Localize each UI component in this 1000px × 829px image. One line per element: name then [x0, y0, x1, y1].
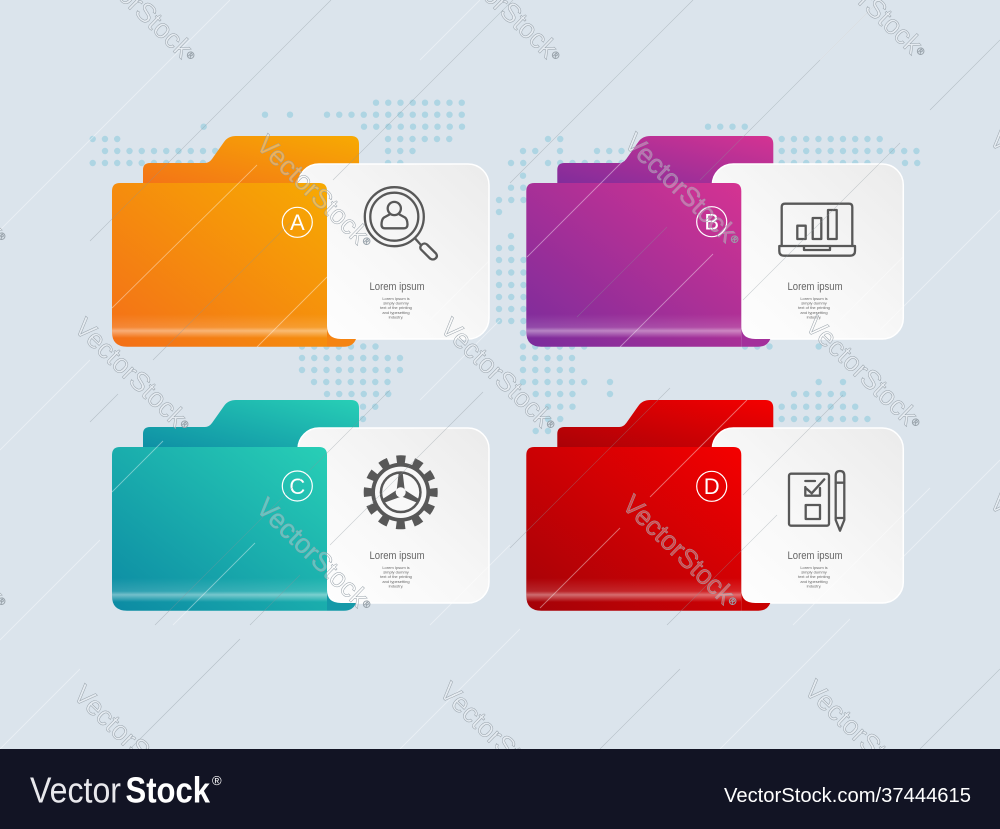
folder A highlight: [112, 314, 327, 338]
folder D back: [557, 400, 773, 456]
card B text: industry.: [807, 314, 821, 319]
watermarks: VectorStock®: [800, 310, 929, 436]
watermarks: VectorStock®: [617, 489, 746, 615]
card A text: Lorem Ipsum is: [382, 296, 410, 301]
watermarks: VectorStock®: [69, 312, 198, 438]
folder A back: [143, 136, 359, 192]
folder D: [526, 400, 903, 611]
card C text: Lorem Ipsum is: [382, 565, 410, 570]
badge A: A: [290, 210, 305, 235]
footer image id: VectorStock.com/37444615: [724, 784, 971, 807]
icon: laptop chart: [779, 204, 855, 256]
icon: checklist and pen: [789, 471, 844, 531]
card A: [298, 164, 489, 339]
card C text: industry.: [389, 583, 403, 588]
folder D lip: [741, 590, 770, 611]
card A text: and typesetting: [382, 310, 410, 315]
dotted world map: [93, 103, 918, 431]
card D text: and typesetting: [800, 579, 828, 584]
card A text: Lorem ipsum: [370, 281, 424, 293]
footer logo: Vector: [30, 770, 121, 810]
watermarks: VectorStock®: [799, 674, 928, 800]
card D text: [788, 550, 842, 588]
badge D: [697, 471, 727, 501]
folder B highlight: [526, 314, 741, 338]
badge B: B: [704, 210, 719, 234]
card B text: text of the printing: [798, 305, 830, 310]
card D text: simply dummy: [801, 570, 827, 575]
footer logo: Stock: [126, 770, 211, 810]
folder C lip: [327, 590, 356, 611]
card B text: simply dummy: [801, 301, 827, 306]
folder C: [112, 400, 489, 611]
card B text: and typesetting: [800, 310, 828, 315]
badge D: D: [704, 474, 720, 499]
card A text: industry.: [389, 314, 403, 319]
watermarks: VectorStock®: [68, 679, 197, 805]
folder B lip: [741, 326, 770, 347]
watermarks: VectorStock®: [434, 676, 563, 802]
badge B: [697, 207, 727, 237]
card D text: Lorem ipsum: [788, 550, 842, 562]
card B: [712, 164, 903, 339]
folder D highlight: [526, 578, 741, 602]
watermarks: VectorStock®: [251, 129, 380, 255]
badge C: [282, 471, 312, 501]
folder B front: [526, 183, 741, 347]
card C text: and typesetting: [382, 579, 410, 584]
icon: gear: [369, 460, 433, 524]
card A text: simply dummy: [383, 301, 409, 306]
watermarks: VectorStock®: [251, 492, 380, 618]
folder A front: [112, 183, 327, 347]
card C text: text of the printing: [380, 574, 412, 579]
folder D front: [526, 447, 741, 611]
card D: [712, 428, 903, 603]
folder C back: [143, 400, 359, 456]
card D text: industry.: [807, 583, 821, 588]
card B text: [788, 281, 842, 319]
card C text: simply dummy: [383, 570, 409, 575]
folder C highlight: [112, 578, 327, 602]
card A text: text of the printing: [380, 305, 412, 310]
card A text: [370, 281, 424, 319]
folder B back: [557, 136, 773, 192]
card B text: Lorem ipsum: [788, 281, 842, 293]
card C: [298, 428, 489, 603]
folder A: [112, 136, 489, 347]
watermarks: VectorStock®: [619, 127, 748, 253]
folder A lip: [327, 326, 356, 347]
card D text: Lorem Ipsum is: [800, 565, 828, 570]
card C text: [370, 550, 424, 588]
folder C front: [112, 447, 327, 611]
footer logo: [30, 770, 222, 810]
watermarks: VectorStock®: [435, 312, 564, 438]
icon: magnifier with person: [365, 187, 437, 260]
footer logo: ®: [212, 773, 222, 788]
card B text: Lorem Ipsum is: [800, 296, 828, 301]
card D text: text of the printing: [798, 574, 830, 579]
badge A: [282, 207, 312, 237]
card C text: Lorem ipsum: [370, 550, 424, 562]
footer band: [0, 749, 1000, 829]
folder B: [526, 136, 903, 347]
badge C: C: [289, 474, 305, 499]
